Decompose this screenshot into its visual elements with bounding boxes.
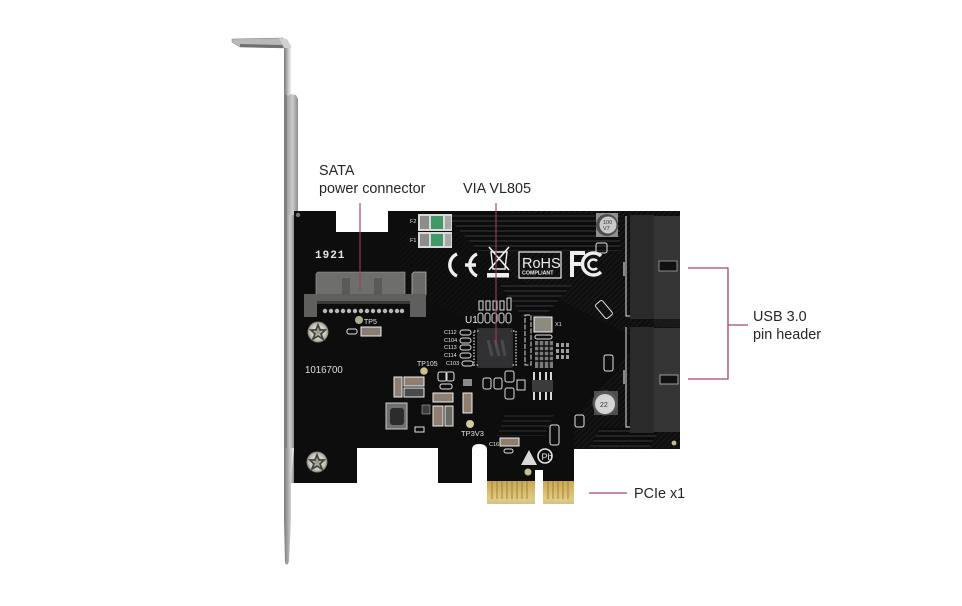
SOIC chip	[532, 372, 553, 400]
bracket line: USB 3.0	[688, 268, 748, 379]
label: USB 3.0 pin header: USB 3.0	[753, 309, 807, 325]
capacitors left of chip: C104	[444, 338, 457, 344]
fuses F1 F2	[410, 214, 452, 248]
capacitor: top: V7	[603, 226, 610, 232]
capacitor: bottom	[592, 390, 618, 416]
capacitor: top	[596, 213, 618, 237]
FCC logo	[572, 253, 601, 277]
test point TP5 and parts: TP5	[364, 319, 377, 326]
screw: top	[308, 322, 328, 342]
bracket	[232, 38, 298, 565]
crystal and right-side components: X1	[555, 322, 562, 328]
label: PCIe x1: PCIe x1	[634, 486, 685, 502]
label: SATA power connector: SATA	[319, 163, 355, 179]
label: SATA power connector: power connector	[319, 181, 426, 197]
silkscreen serial number: 1016700	[305, 365, 343, 376]
label: SATA power connector	[319, 163, 426, 197]
VIA VL805 chip: U1	[465, 315, 478, 326]
test point TP5 and parts	[347, 316, 381, 336]
resistors above chip	[478, 298, 511, 323]
silkscreen date code: 1921	[315, 250, 345, 262]
CE mark	[450, 254, 477, 276]
capacitors left of chip: C103	[446, 361, 459, 367]
VIA VL805 chip	[465, 315, 516, 368]
label: VIA VL805: VIA VL805	[463, 181, 531, 197]
fuses F1 F2: F2	[410, 219, 416, 225]
USB 3.0 pin header: top	[623, 215, 680, 319]
USB 3.0 pin header: bottom	[623, 319, 680, 433]
power components	[394, 361, 484, 438]
crystal and right-side components	[483, 315, 569, 399]
fuses F1 F2: F1	[410, 238, 416, 244]
label: USB 3.0 pin header: pin header	[753, 327, 821, 343]
RoHS compliant logo: COMPLIANT	[522, 270, 554, 276]
capacitors left of chip: C113	[444, 345, 457, 351]
RoHS compliant logo: RoHS	[522, 256, 561, 272]
capacitors near slot and ESD symbols: C16	[489, 442, 499, 448]
power components: TP3V3	[461, 429, 484, 438]
RoHS compliant logo	[519, 252, 561, 278]
capacitors left of chip	[444, 330, 473, 367]
capacitors left of chip: C112	[444, 330, 457, 336]
PCB board	[294, 211, 680, 504]
inductor	[386, 403, 407, 429]
SATA power connector	[304, 272, 426, 317]
capacitors near slot and ESD symbols: Pb	[542, 452, 553, 462]
leader line: SATA	[359, 203, 361, 290]
leader line: VIA VL805	[495, 203, 497, 346]
capacitors left of chip: C114	[444, 353, 457, 359]
capacitors near slot and ESD symbols	[489, 243, 613, 476]
WEEE bin symbol	[487, 247, 509, 278]
power components: TP105	[417, 361, 438, 368]
leader line: PCIe	[589, 492, 627, 494]
PCIe gold fingers	[487, 481, 574, 504]
capacitor: bottom: 22	[600, 402, 608, 409]
label: USB 3.0 pin header	[753, 309, 821, 343]
capacitor: top: 100	[603, 220, 612, 226]
screw: bottom	[306, 452, 328, 472]
